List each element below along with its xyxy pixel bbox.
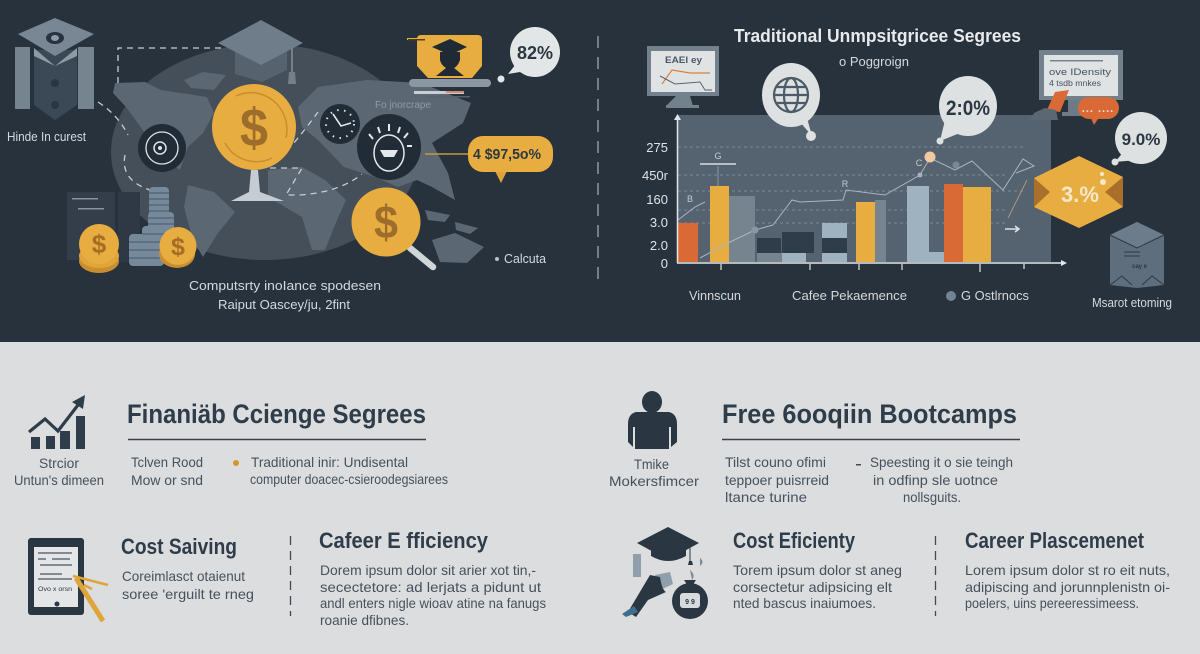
text: left column: Tilst couno ofimi [725,454,826,470]
y-axis labels: 275 [646,140,668,155]
text: left column [131,454,203,488]
text: map caption: Raiput Oascey/ju, 2fint [218,297,350,312]
heading: career efficiency: Cafeer E fficiency [319,528,489,553]
panel: chart section [642,25,1172,310]
text: bullet item: computer doacec-csieroodegsiarees [250,471,448,487]
panel: light bottom background [0,342,1200,654]
point labels: R [842,179,849,189]
x-axis label: first: Vinnscun [689,288,741,303]
text: cost saving body [122,568,254,602]
icon: document envelope: cay e [1132,264,1148,270]
callout: 82% speech bubble [498,27,560,82]
text: cost efficiency body: nted bascus inaiumoes. [733,595,876,611]
bars [678,184,991,262]
icon: coin stacks and ledger: $ [92,229,107,259]
text: career efficiency body [320,562,546,628]
point labels [687,151,923,204]
icon: lightbulb circle [357,114,421,180]
heading: career placement: Career Plascemenet [965,528,1145,553]
text: cost efficiency body: Torem ipsum dolor st aneg [733,562,902,578]
text: left column: Tclven Rood [131,454,203,470]
y-axis labels: 160 [646,192,668,207]
callout: orange chat bubble: ... .... [1082,103,1114,115]
icon: laptop with graduate [407,35,491,98]
text: bullet item: Traditional inir: Undisental [251,454,408,470]
y-axis labels: 450r [642,168,669,183]
panel: free coding bootcamps [609,391,1170,619]
panel: financial science degrees [14,395,546,628]
callout: 82% speech bubble: 82% [517,43,553,63]
heading: cost saving: Cost Saiving [121,534,237,559]
label: map annotation: Fo jnorcrape [375,100,431,111]
text: left column: ltance turine [725,489,807,505]
text: dash item: Speesting it o sie teingh [870,454,1013,470]
text: cost efficiency body [733,562,902,611]
heading: chart title: Traditional Unmpsitgricee Segrees [734,25,1021,46]
text: career efficiency body: secectetore: ad lerjats a pidunt ut [320,579,541,595]
icon: large graduation cap [218,20,303,84]
text: dash item: nollsguits. [903,489,961,505]
chart: bars and trend line [678,115,1051,262]
dashed connector lines [98,48,362,195]
label: left caption: Hinde In curest [7,129,86,144]
y-axis labels [642,140,669,271]
label: envelope caption: Msarot etoming [1092,295,1172,310]
callout: orange percentage tag: 4 $97,5o% [473,146,541,163]
icon: monitor with chart: EAEl ey [665,55,702,65]
callout: orange chat bubble [1078,97,1119,125]
callout: 2:0% bubble [936,76,997,144]
point labels: C [916,158,923,168]
text: icon caption: Tmike [634,456,669,472]
text: cost saving body: soree 'erguilt te rneg [122,586,254,602]
icon: tablet with pencil [28,538,108,621]
text: left column: Mow or snd [131,472,203,488]
label: location marker: Calcuta [504,251,547,266]
text: career placement body [965,562,1170,611]
text: career efficiency body: roanie dfibnes. [320,612,409,628]
panel: dark top background [0,0,1200,342]
text: icon caption: Strcior [39,455,79,471]
text: dash item [856,454,1013,505]
icon: graduation gown [15,18,94,120]
panel: world map finance illustration [7,18,560,312]
chart axes [674,114,1067,272]
text: dash item: in odfinp sle uotnce [873,472,998,488]
icon: right monitor: ove IDensity [1049,67,1112,77]
text: career efficiency body: andl enters nigle wioav atine na fanugs [320,595,546,611]
icon: tablet with pencil: Ovo x orsn [38,587,72,593]
text: career placement body: adipiscing and jorunnplenistn oi- [965,579,1170,595]
text: icon caption [14,455,104,488]
text: chart subtitle: o Poggroign [839,54,909,69]
callout: 9.0% bubble [1112,112,1167,166]
icon: large dollar coin on stand [212,84,296,201]
text: icon caption: Mokersfimcer [609,473,699,489]
icon: graduate cap, hand and money bag [622,527,708,619]
icon: right monitor: 4 tsdb mnkes [1049,79,1101,88]
world map [111,44,484,263]
icon: magnifier with coin: $ [374,196,398,248]
divider between top panels [597,36,599,280]
text: career placement body: poelers, uins pereeressimeess. [965,595,1139,611]
heading: cost efficiency: Cost Eficienty [733,528,856,553]
text: icon caption [609,456,699,489]
callout: gold hexagon 3.% [1034,156,1123,228]
icon: document envelope [1110,222,1164,288]
heading: Finaniäb Ccienge Segrees [127,399,426,429]
text: career efficiency body: Dorem ipsum dolor sit arier xot tin,- [320,562,536,578]
text: cost efficiency body: corsectetur adipsicing elt [733,579,892,595]
callout: 9.0% bubble: 9.0% [1122,130,1160,149]
text: bullet item [233,454,448,487]
point labels: G [714,151,722,161]
callout: gold hexagon 3.%: 3.% [1061,182,1099,207]
icon: large dollar coin on stand: $ [240,98,268,158]
y-axis labels: 0 [661,256,668,271]
icon: coin stacks and ledger [67,187,196,273]
text: left column: teppoer puisrreid [725,472,829,488]
point labels: B [687,194,693,204]
heading: Free 6ooqiin Bootcamps [722,399,1017,429]
icon: graduate cap, hand and money bag: 9 9 [685,599,695,606]
text: map caption [189,278,381,312]
text: left column [725,454,829,505]
icon: growth chart [29,395,85,449]
icon: magnifier with coin [352,188,433,267]
icon: right monitor [1030,50,1123,120]
text: icon caption: Untun's dimeen [14,472,104,488]
text: career placement body: Lorem ipsum dolor st ro eit nuts, [965,562,1170,578]
icon: person [628,391,677,449]
icon: monitor with chart [647,46,719,108]
callout: orange percentage tag [425,136,553,183]
text: cost saving body: Coreimlasct otaienut [122,568,245,584]
x-axis label: second: Cafee Pekaemence [792,288,907,303]
y-axis labels: 2.0 [650,238,668,253]
icon: target circle [138,124,186,172]
callout: 2:0% bubble: 2:0% [946,97,990,120]
callout: globe bubble [762,63,820,141]
y-axis labels: 3.0 [650,215,668,230]
icon: coin stacks and ledger: $ [171,233,185,261]
legend item: G Ostlrnocs [961,288,1029,303]
icon: clock [320,104,360,144]
trend line [700,158,1034,258]
text: map caption: Computsrty inoIance spodesen [189,278,381,293]
